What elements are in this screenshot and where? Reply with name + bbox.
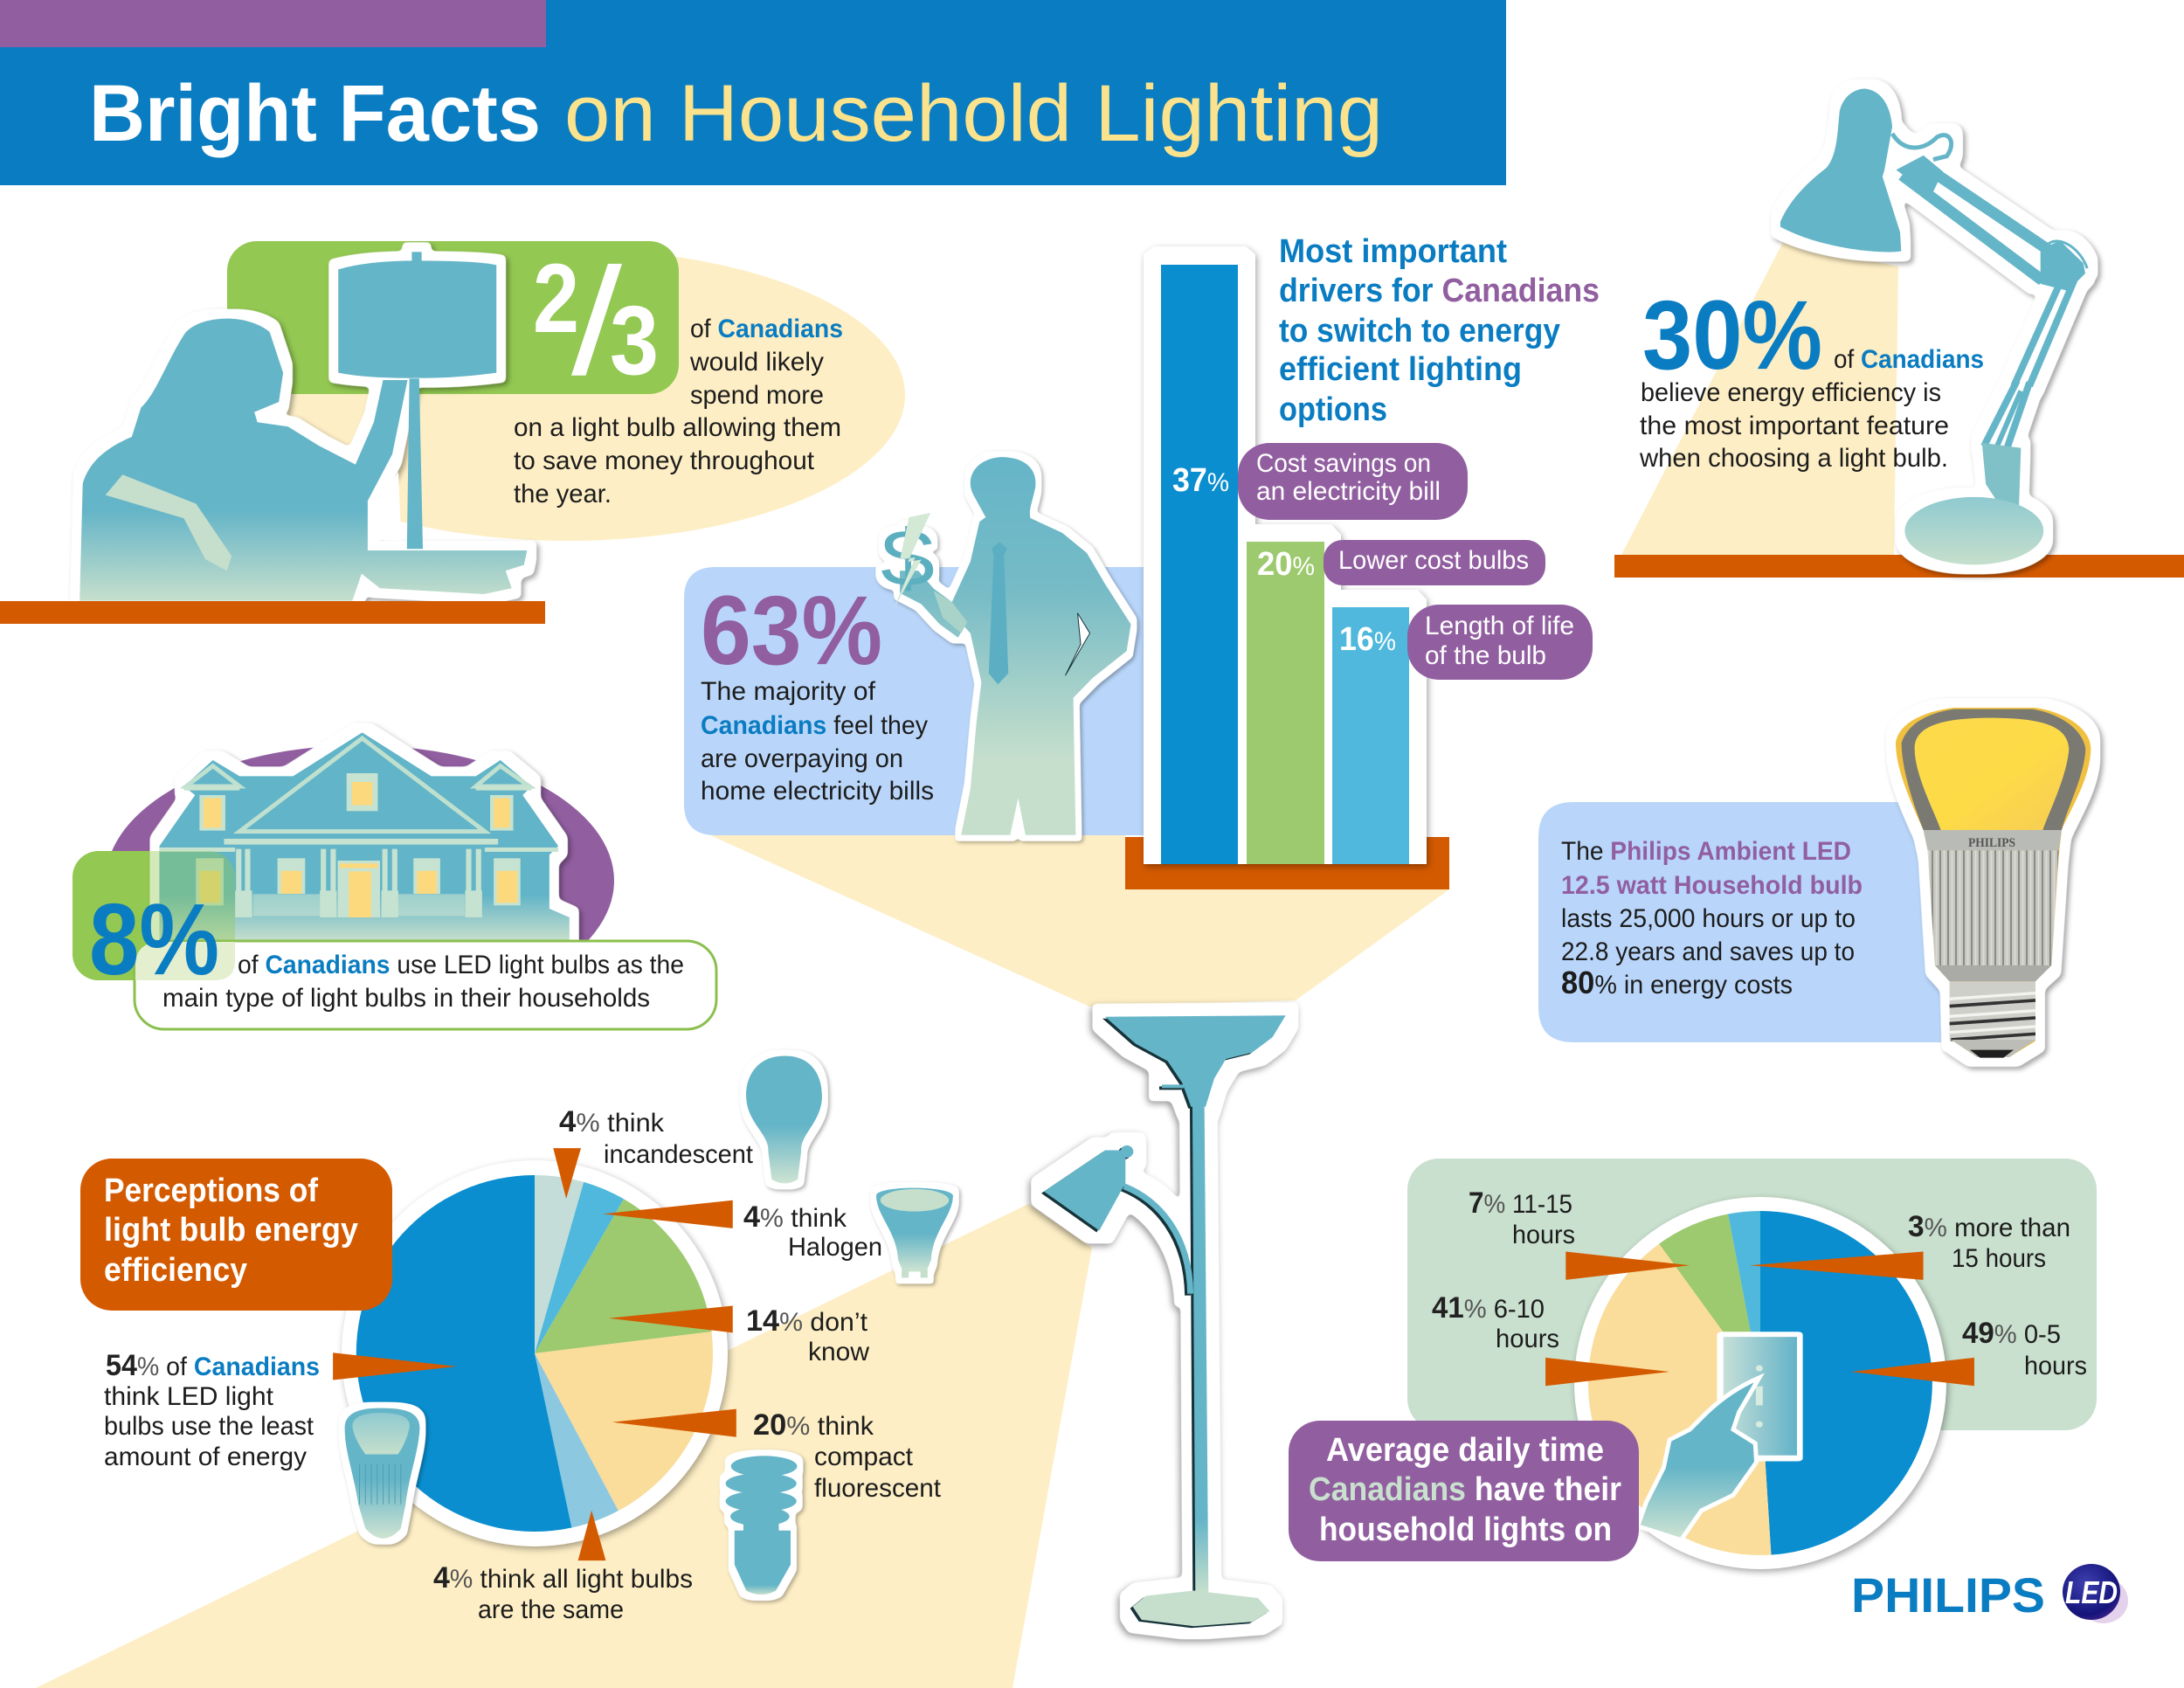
panel: 8 percent LED households [73, 732, 716, 1029]
slice: all the same 4 percent [535, 1353, 619, 1527]
icon: floor lamp [1044, 1015, 1286, 1626]
stat: 8%: 8% [89, 882, 219, 996]
slice: more than 15 hours 3 percent [1728, 1211, 1760, 1383]
slice: 11-15 hours 7 percent [1659, 1214, 1760, 1383]
icon: Philips LED bulb [1896, 708, 2091, 1057]
pie label: LED: think LED light [104, 1382, 274, 1411]
pie label: compact fluorescent [753, 1408, 942, 1503]
label: cost savings [1238, 443, 1468, 520]
heading: perceptions: light bulb energy [104, 1212, 358, 1249]
icon: man holding dollar sign [881, 457, 1131, 835]
text: Philips bulb description [1561, 837, 1863, 1000]
text: 30 percent description [1639, 345, 1984, 473]
pie label: 11-15 hours: 7% 11-15 [1469, 1186, 1572, 1220]
pie label: LED: 54% of Canadians [106, 1349, 320, 1382]
slice: halogen 4 percent [535, 1182, 624, 1353]
stat: 30%: 30% [1642, 280, 1822, 390]
text: overpaying description: home electricity bills [701, 777, 934, 806]
heading: perceptions: efficiency [104, 1252, 247, 1289]
text: Philips bulb description: The Philips Ambient LED [1561, 837, 1851, 866]
bulb brand label: PHILIPS [1968, 836, 2015, 850]
pie pointers [1545, 1251, 1974, 1386]
text: 30 percent description: believe energy efficiency is [1641, 378, 1941, 407]
cream light beam from floor lamp upward [710, 835, 1449, 1007]
heading: perceptions: Perceptions of [104, 1173, 318, 1209]
pie label: more than 15 hours [1908, 1210, 2070, 1273]
pie label: LED [104, 1349, 320, 1471]
pie label: 0-5 hours [1962, 1317, 2087, 1380]
text: Philips bulb description: 12.5 watt Household bulb [1561, 871, 1863, 900]
text: two thirds description: would likely [689, 348, 824, 377]
text: Philips bulb description: 80% in energy costs [1561, 965, 1793, 1000]
slice: compact fluorescent 20 percent [535, 1332, 713, 1511]
pie pointers [333, 1148, 736, 1560]
pie label: 6-10 hours: hours [1496, 1325, 1559, 1353]
panel: two thirds spend more [79, 236, 905, 601]
bar: 37 percent [1161, 265, 1238, 864]
stat: 2/3: / [571, 236, 623, 406]
text: 30 percent description: of Canadians [1834, 345, 1984, 374]
panel: 63 percent overpaying [684, 457, 1162, 835]
orange shelf left [0, 601, 545, 624]
heading: most important drivers: drivers for Canadians [1279, 273, 1600, 309]
cream light beam from reading lamp [36, 1204, 1092, 1688]
stat: 2/3 [533, 236, 659, 406]
text: two thirds description: the year. [514, 480, 612, 508]
pie label: all the same: 4% think all light bulbs [433, 1561, 693, 1595]
pie chart: perceptions of energy efficiency [342, 1160, 728, 1546]
icon: light switch and hand [1638, 1332, 1803, 1540]
icon: woman at table lamp [79, 252, 527, 601]
pie label: don't know: know [808, 1338, 869, 1366]
label: lower cost bulbs [1324, 540, 1545, 585]
slice: 6-10 hours 41 percent [1588, 1244, 1771, 1555]
label: cost savings: Cost savings on [1256, 449, 1431, 478]
logo: Philips LED: LED [2065, 1574, 2118, 1610]
label: length of life: Length of life [1425, 612, 1574, 640]
pie label: halogen [743, 1200, 882, 1262]
slice: LED 54 percent [356, 1175, 571, 1532]
stat: 2/3: 3 [610, 286, 659, 395]
bar: 20 percent [1247, 542, 1324, 864]
title: Bright Facts [89, 69, 541, 158]
text: two thirds description: to save money throughout [514, 446, 815, 475]
pie label: compact fluorescent: fluorescent [814, 1474, 942, 1503]
pie label: 6-10 hours [1432, 1291, 1559, 1353]
pie label: 6-10 hours: 41% 6-10 [1432, 1291, 1545, 1325]
text: two thirds description: spend more [690, 381, 824, 410]
pie label: LED: bulbs use the least [104, 1412, 314, 1441]
pie label: halogen: 4% think [743, 1200, 847, 1234]
icon: halogen bulb [876, 1188, 953, 1277]
icon: desk lamp [1780, 89, 2087, 564]
slice: incandescent 4 percent [535, 1175, 584, 1353]
pie label: LED: amount of energy [104, 1442, 307, 1471]
heading: average daily time: household lights on [1319, 1512, 1612, 1548]
label: cost savings: an electricity bill [1256, 477, 1441, 506]
text: overpaying description: are overpaying on [701, 744, 903, 773]
text: two thirds description [514, 315, 843, 508]
pie label: 0-5 hours: hours [2024, 1352, 2087, 1380]
bar values: 37% [1172, 462, 1229, 499]
text: LED use description: main type of light bulbs in their households [162, 984, 650, 1013]
callout box: LED use [135, 941, 716, 1029]
pie label: incandescent: incandescent [604, 1140, 754, 1169]
slice: don't know 14 percent [535, 1199, 711, 1353]
pie label: all the same: are the same [478, 1595, 624, 1624]
orange base of bar chart [1125, 837, 1449, 889]
pie label: 0-5 hours: 49% 0-5 [1962, 1317, 2061, 1350]
pie label: more than 15 hours: 3% more than [1908, 1210, 2070, 1243]
text: overpaying description: The majority of [701, 677, 876, 706]
text: overpaying description [701, 677, 934, 806]
icon: compact fluorescent bulb [726, 1456, 797, 1595]
pie label: more than 15 hours: 15 hours [1952, 1244, 2046, 1273]
title: on Household Lighting [564, 69, 1383, 158]
heading: most important drivers: options [1279, 391, 1387, 428]
pie label: don't know [746, 1304, 869, 1366]
panel: Philips LED bulb [1538, 708, 2091, 1058]
pie label: incandescent [559, 1105, 754, 1169]
heading: perceptions [80, 1159, 392, 1311]
heading: average daily time: Canadians have their [1309, 1471, 1621, 1508]
icon: LED bulb [345, 1408, 419, 1539]
panel: average daily time lights on [1289, 1159, 2097, 1569]
pie label: 11-15 hours [1469, 1186, 1575, 1249]
text: overpaying description: Canadians feel they [701, 711, 928, 740]
header banner [0, 0, 1506, 185]
stat: 2/3: 2 [533, 244, 579, 353]
bar values: 20% [1257, 546, 1315, 583]
pie chart: daily hours [1574, 1197, 1946, 1569]
pie label: halogen: Halogen [788, 1233, 882, 1262]
logo: Philips LED: PHILIPS [1851, 1567, 2045, 1622]
text: two thirds description: on a light bulb allowing them [514, 413, 841, 442]
heading: average daily time [1289, 1421, 1639, 1561]
icon: house [159, 732, 570, 941]
pie label: compact fluorescent: compact [814, 1442, 914, 1471]
bar: 16 percent [1332, 607, 1409, 864]
heading: average daily time: Average daily time [1326, 1432, 1604, 1469]
text: LED use description [162, 951, 684, 1013]
text: Philips bulb description: 22.8 years and saves up to [1561, 937, 1855, 966]
pie label: all the same [433, 1561, 693, 1624]
icon: incandescent bulb [746, 1055, 822, 1183]
label: length of life [1407, 605, 1593, 680]
pie label: compact fluorescent: 20% think [753, 1408, 874, 1442]
bar values [1172, 462, 1396, 658]
pie label: don't know: 14% don’t [746, 1304, 868, 1338]
pie label: incandescent: 4% think [559, 1105, 665, 1138]
text: LED use description: of Canadians use LED light bulbs as the [238, 951, 684, 979]
title [89, 69, 1383, 158]
heading: most important drivers: to switch to energy [1279, 313, 1560, 349]
text: two thirds description: of Canadians [690, 315, 843, 343]
stat: 63%: 63% [701, 576, 882, 685]
heading: most important drivers [1279, 233, 1600, 428]
pie label: 11-15 hours: hours [1512, 1221, 1575, 1249]
text: Philips bulb description: lasts 25,000 hours or up to [1561, 904, 1856, 933]
heading: most important drivers: Most important [1279, 233, 1507, 270]
panel: 30 percent energy efficiency [1614, 89, 2184, 578]
slice: 0-5 hours 49 percent [1760, 1211, 1932, 1555]
label: lower cost bulbs: Lower cost bulbs [1338, 546, 1529, 575]
text: 30 percent description: when choosing a light bulb. [1639, 444, 1948, 473]
bar chart: drivers to switch [1144, 246, 1593, 864]
logo: Philips LED [1851, 1564, 2128, 1623]
bar values: 16% [1339, 621, 1396, 658]
text: 30 percent description: the most important feature [1640, 412, 1949, 440]
label: length of life: of the bulb [1425, 641, 1546, 670]
icon: man holding dollar sign: $ [881, 514, 935, 603]
heading: most important drivers: efficient lighting [1279, 351, 1522, 388]
